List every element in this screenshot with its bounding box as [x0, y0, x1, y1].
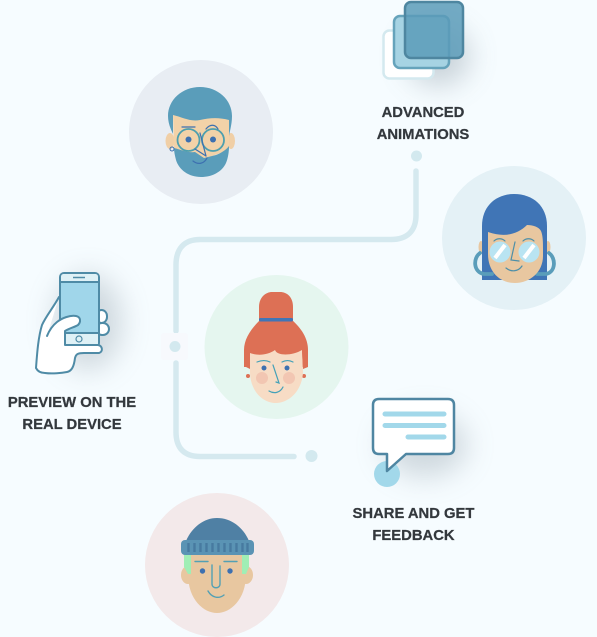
icon: hand holding phone [36, 273, 122, 373]
heading: preview on the real device: PREVIEW ON THE [8, 395, 136, 411]
heading: preview on the real device: REAL DEVICE [22, 417, 122, 433]
connector path [161, 150, 422, 462]
heading: share and get feedback: SHARE AND GET [353, 506, 474, 522]
avatar: man with beanie [145, 493, 289, 637]
avatar: woman with red bun [204, 275, 348, 419]
avatar: woman with sunglasses [442, 166, 586, 310]
icon: stacked layers [384, 2, 470, 86]
heading: share and get feedback [353, 506, 474, 544]
heading: advanced animations [377, 105, 469, 143]
icon: speech bubble [373, 399, 467, 487]
heading: preview on the real device [8, 395, 136, 433]
heading: advanced animations: ADVANCED [382, 105, 465, 121]
avatar: bearded man with glasses [129, 60, 273, 204]
heading: advanced animations: ANIMATIONS [377, 127, 469, 143]
heading: share and get feedback: FEEDBACK [372, 528, 455, 544]
